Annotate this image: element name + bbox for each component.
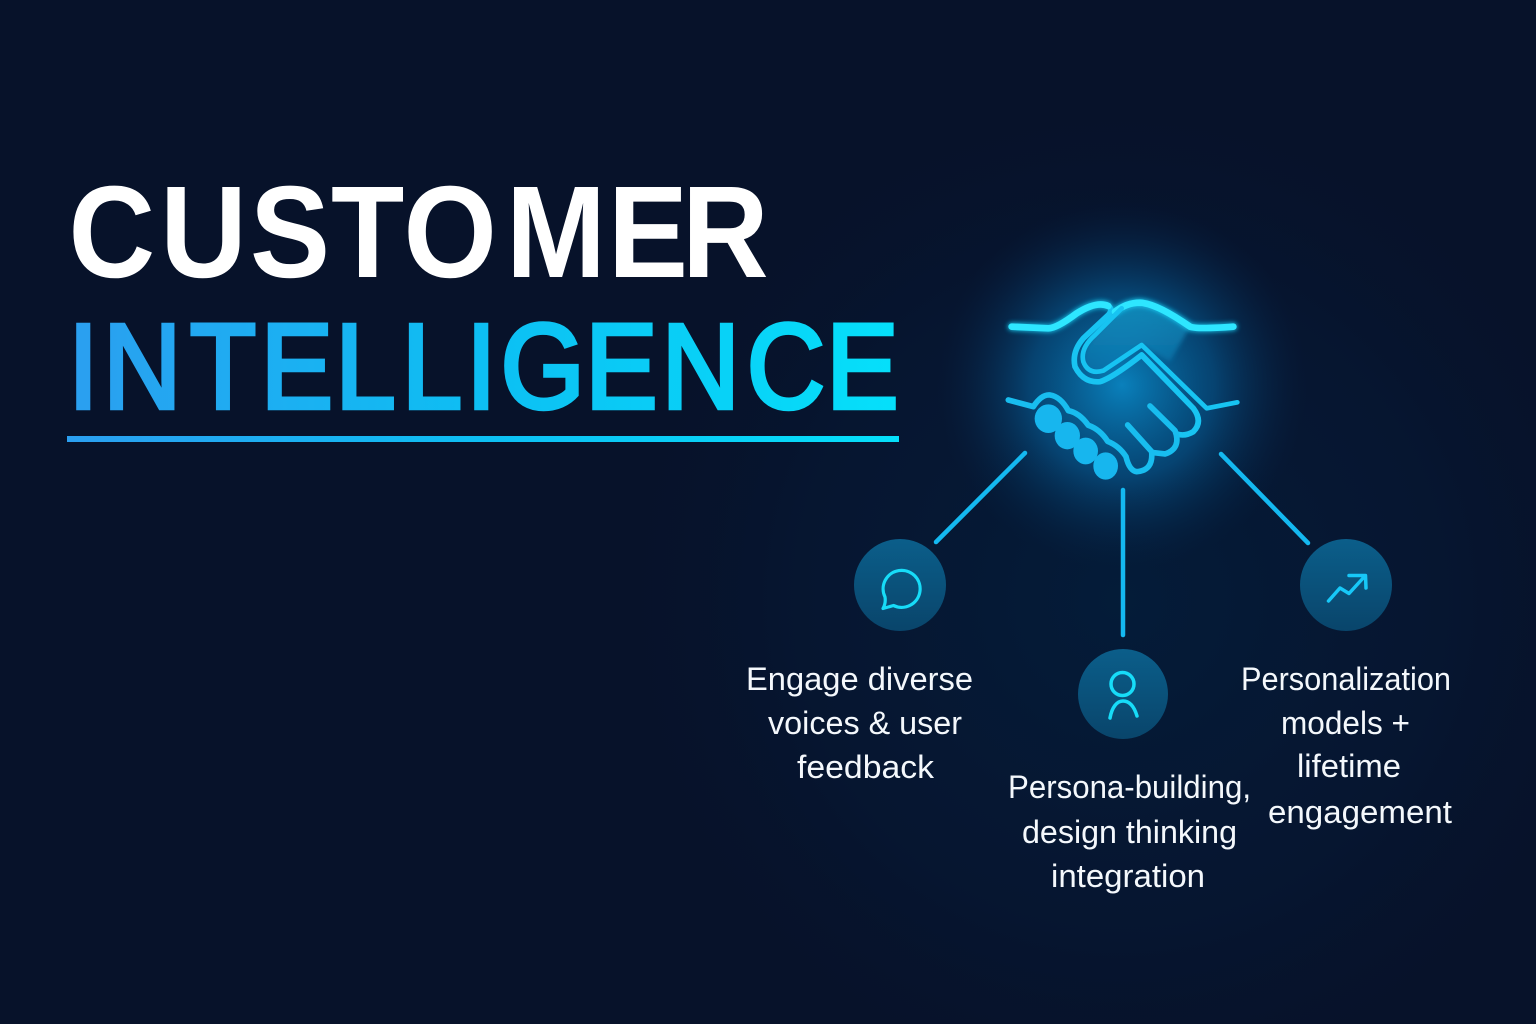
label: personalization: Personalization xyxy=(1241,661,1451,697)
handshake upper outlines xyxy=(1074,306,1198,435)
icon: trend arrow xyxy=(1328,576,1366,601)
label: engage: Engage diverse xyxy=(746,661,973,697)
label: persona: Persona-building, xyxy=(1008,769,1251,805)
label: personalization: lifetime xyxy=(1297,748,1401,784)
label: engage: voices & user xyxy=(768,705,962,741)
knuckles xyxy=(1035,404,1118,480)
label: engage xyxy=(746,661,973,785)
title: customer: CUSTOMER xyxy=(68,158,769,305)
label: persona: design thinking xyxy=(1022,814,1237,850)
label: persona xyxy=(1008,769,1251,894)
label: personalization xyxy=(1241,661,1452,830)
inner outline of upper hand xyxy=(1083,308,1237,408)
node: personalization xyxy=(1300,539,1392,631)
label: persona: integration xyxy=(1051,858,1205,894)
icon: person xyxy=(1110,672,1137,718)
upper hand fill xyxy=(1083,303,1190,373)
fingers xyxy=(1150,406,1177,454)
node: persona xyxy=(1078,649,1168,739)
label: personalization: engagement xyxy=(1268,794,1452,830)
label: personalization: models + xyxy=(1281,705,1410,741)
node: engage xyxy=(854,539,946,631)
title underline xyxy=(67,436,899,442)
top cuff glow xyxy=(1012,303,1233,328)
connector: left xyxy=(936,453,1025,542)
icon: speech bubble xyxy=(883,570,920,608)
icon: handshake xyxy=(1008,303,1237,480)
connector: right xyxy=(1221,454,1308,543)
connector: middle xyxy=(1121,490,1125,635)
title: intelligence: INTELLIGENCE xyxy=(68,299,898,434)
label: engage: feedback xyxy=(797,749,935,785)
